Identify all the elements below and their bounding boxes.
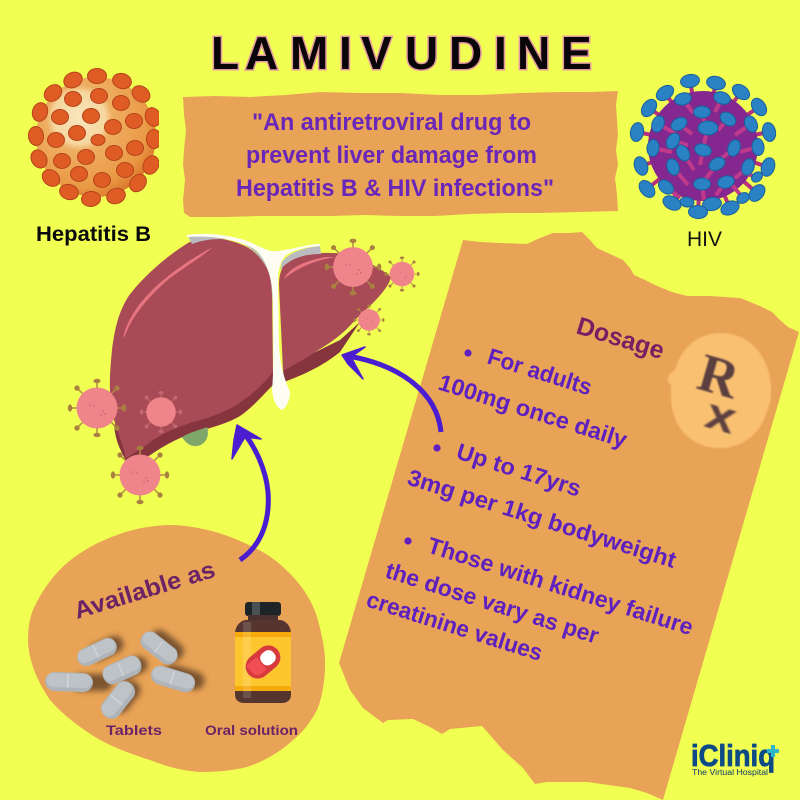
banner text: Hepatitis B & HIV infections" [236, 175, 554, 202]
right lobe [110, 238, 273, 458]
dosage list: 100mg once daily [435, 369, 630, 453]
logo tagline: The Virtual Hospital [692, 768, 768, 777]
gallbladder [182, 427, 208, 446]
icon: Rx badge [668, 333, 771, 448]
left lobe [283, 322, 360, 382]
dosage list: For adults [484, 343, 595, 400]
dosage list [363, 343, 696, 666]
panel: dosage paper [339, 232, 799, 800]
dosage list: the dose vary as per [382, 557, 602, 649]
dosage list: 3mg per 1kg bodyweight [404, 464, 680, 573]
title: LAMIVUDINE [211, 27, 592, 79]
icon: bottle [235, 602, 291, 703]
arrow: dosage to liver [342, 347, 441, 432]
liver highlights [124, 247, 213, 338]
dosage list: Those with kidney failure [424, 532, 696, 640]
panel: available as [28, 525, 325, 772]
logo plus [767, 745, 779, 757]
dosage heading: Dosage [573, 312, 668, 365]
label: tablets: Tablets [106, 722, 162, 738]
icon: Hepatitis B virus [28, 68, 163, 207]
liver shadow edge [114, 372, 273, 465]
panel: definition banner [183, 91, 618, 217]
icon: HIV virus [629, 73, 777, 219]
arrow: available forms to liver [232, 425, 268, 560]
label: Hepatitis B: Hepatitis B [36, 223, 151, 246]
logo: iCliniq: iCliniq [691, 738, 775, 773]
icon: virus cluster on liver [68, 239, 420, 504]
label: HIV: HIV [687, 228, 722, 251]
icon: tablets [45, 626, 207, 723]
falciform ligament [188, 234, 273, 310]
banner text: "An antiretroviral drug to [252, 109, 531, 136]
icon: liver [110, 234, 391, 465]
banner text [236, 109, 554, 202]
banner text: prevent liver damage from [246, 142, 537, 169]
icon: Rx badge: x [700, 389, 742, 444]
dosage list: Up to 17yrs [453, 438, 584, 502]
heading: available as: Available as [71, 556, 218, 625]
icon: Rx badge: R [692, 342, 747, 411]
label: oral solution: Oral solution [205, 722, 298, 738]
dosage list: creatinine values [363, 586, 546, 666]
